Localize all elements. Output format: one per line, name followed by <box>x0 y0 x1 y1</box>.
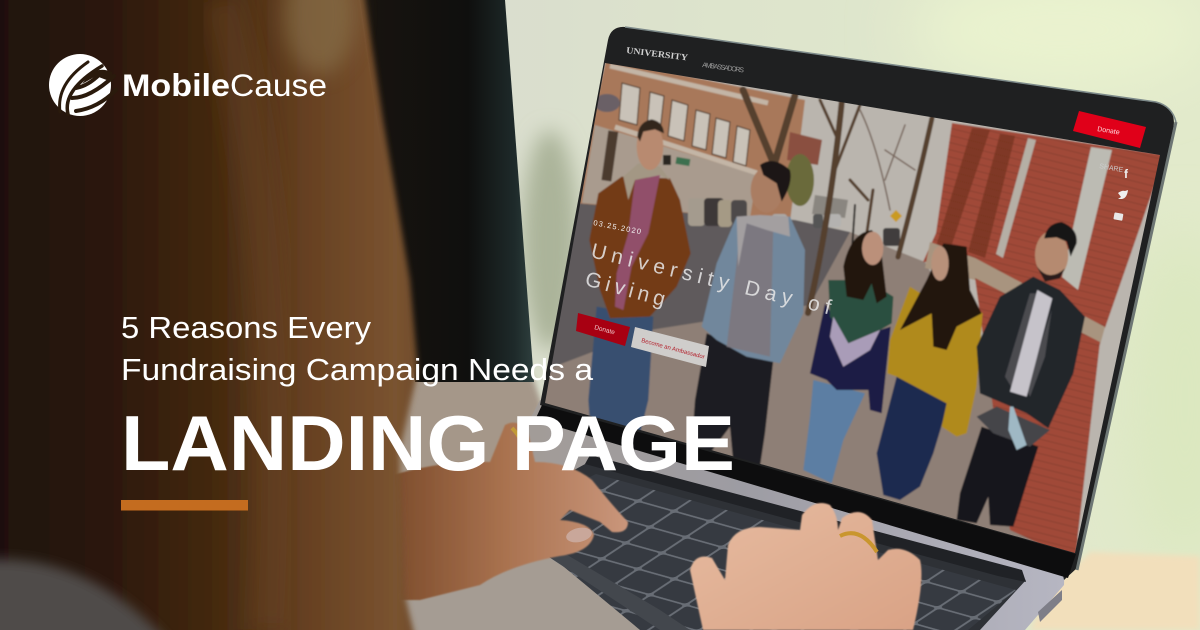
headline line two: Fundraising Campaign Needs a <box>121 352 594 387</box>
webpage share icons: f <box>1124 167 1129 181</box>
road <box>545 203 850 370</box>
lower bezel <box>535 405 1076 578</box>
logo wordmark: Cause <box>230 67 327 103</box>
student 3 <box>803 230 893 483</box>
webpage nav brand: UNIVERSITY <box>626 45 689 63</box>
logo wordmark: Mobile <box>122 67 230 103</box>
webpage donate button: Donate <box>593 324 616 336</box>
webpage top donate button <box>1073 111 1146 148</box>
logo wordmark <box>122 67 327 103</box>
building windows <box>619 83 750 166</box>
lower brick wall <box>975 278 1100 560</box>
sweater at shoulder <box>0 559 175 630</box>
right hand <box>690 503 921 630</box>
distant brick building and tree <box>786 132 848 218</box>
logo <box>49 54 327 116</box>
keyboard lower lip <box>488 517 690 630</box>
headline line one: 5 Reasons Every <box>121 310 372 345</box>
orange accent bar <box>121 500 248 510</box>
student 4 <box>877 243 983 500</box>
webpage donate button <box>576 313 630 346</box>
table behind hand <box>395 375 542 605</box>
stone ledge <box>925 242 1105 345</box>
trackpad <box>400 520 650 630</box>
ring <box>840 533 877 552</box>
side ports <box>1038 590 1062 622</box>
webpage title: University Day of <box>589 239 834 319</box>
keyboard <box>488 463 1026 630</box>
upper red brick wall <box>923 123 1165 328</box>
student 5 <box>957 222 1085 527</box>
student 1 <box>588 119 691 433</box>
group of students <box>588 119 1085 527</box>
webpage share icons: SHARE <box>1099 163 1124 174</box>
woman's long hair <box>0 0 418 630</box>
webpage ambassador button <box>631 327 709 367</box>
screen lid <box>540 27 1174 580</box>
headline main: LANDING PAGE <box>121 399 735 487</box>
webpage date: 03.25.2020 <box>593 218 643 236</box>
bare trees <box>743 90 932 313</box>
webpage nav link: AMBASSADORS <box>702 62 745 75</box>
student 2 <box>692 161 805 467</box>
screen photo <box>545 63 1160 553</box>
left hand <box>383 423 628 600</box>
gold ring <box>512 428 524 456</box>
laptop base <box>420 400 1065 630</box>
hair highlights <box>220 0 356 630</box>
sidewalk <box>530 232 1090 560</box>
laptop <box>400 27 1180 630</box>
road sign <box>890 210 902 222</box>
fingernail <box>565 525 593 545</box>
wooden table <box>1030 552 1200 630</box>
webpage title: Giving <box>583 268 668 311</box>
tan building <box>575 60 805 222</box>
webpage share icons <box>1099 163 1129 221</box>
webpage ambassador button: Become an Ambassador <box>640 338 705 361</box>
headline <box>121 310 735 487</box>
storefront details <box>594 94 690 181</box>
touch bar <box>585 455 1026 582</box>
parked cars <box>688 198 900 246</box>
dark background strip behind hair <box>360 0 534 382</box>
logo globe icon <box>49 54 116 116</box>
webpage top donate button: Donate <box>1097 126 1120 137</box>
